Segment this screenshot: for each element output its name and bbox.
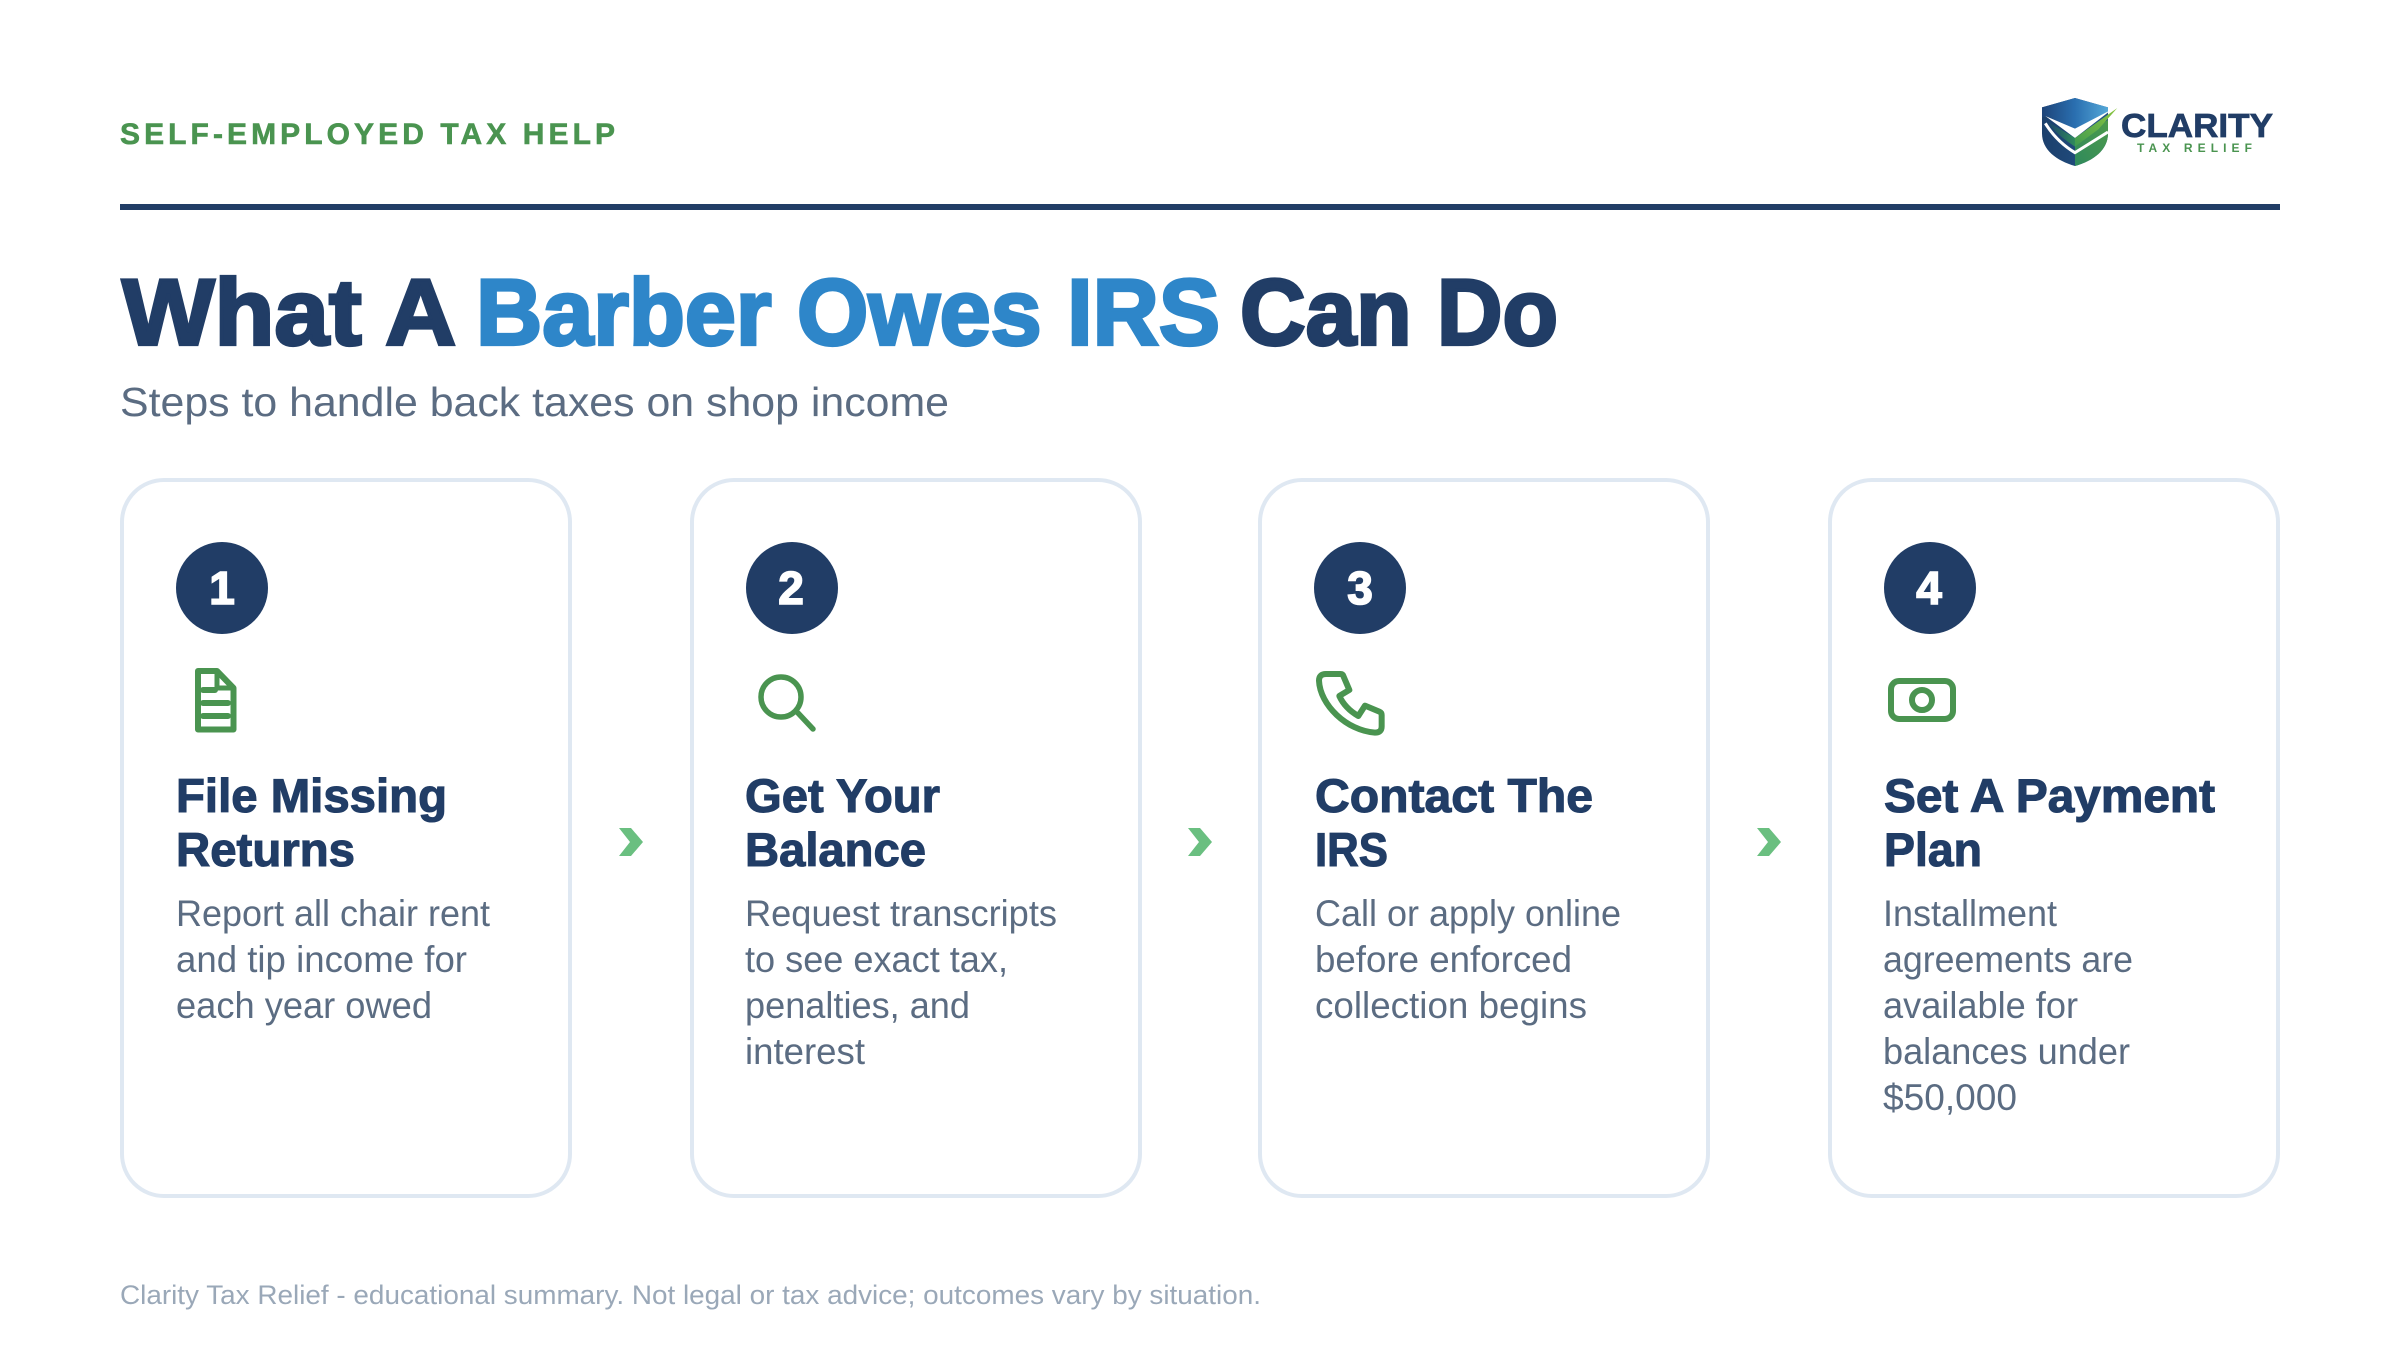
logo wordmark: CLARITY — [2121, 107, 2273, 144]
step number 2 — [746, 542, 838, 634]
step 1 description: each year owed — [176, 985, 432, 1026]
step 1 heading — [176, 769, 447, 876]
step 2 description: interest — [745, 1031, 866, 1072]
step number 4 — [1884, 542, 1976, 634]
step number 1: 1 — [209, 562, 235, 614]
step number 2: 2 — [778, 562, 804, 614]
icon: cash bill — [1891, 681, 1953, 719]
step 4 description: Installment — [1883, 893, 2058, 934]
step 4 heading: Plan — [1884, 823, 1982, 876]
header rule — [120, 204, 2280, 210]
title: Can Do — [1240, 260, 1558, 364]
logo shield icon — [2042, 98, 2117, 166]
step 3 description — [1315, 893, 1621, 1026]
panel: step 4 set a payment plan — [1830, 480, 2278, 1196]
step number 3 — [1314, 542, 1406, 634]
subtitle: Steps to handle back taxes on shop income — [120, 379, 949, 425]
step number 1 — [176, 542, 268, 634]
step 4 description: $50,000 — [1883, 1077, 2017, 1118]
step 3 heading — [1315, 769, 1593, 876]
step 2 description: penalties, and — [745, 985, 970, 1026]
arrow 1 — [619, 828, 643, 856]
title: What A — [122, 260, 456, 364]
icon: document — [198, 671, 234, 730]
step 1 heading: Returns — [176, 823, 355, 876]
step 4 description: balances under — [1883, 1031, 2130, 1072]
step 4 heading — [1884, 769, 2215, 876]
icon: magnifying glass — [761, 677, 813, 729]
title: Barber Owes IRS — [476, 260, 1220, 364]
logo: Clarity Tax Relief — [2042, 98, 2273, 166]
step 2 heading: Balance — [745, 823, 926, 876]
arrow 3 — [1757, 828, 1781, 856]
icon: phone — [1319, 674, 1382, 733]
step number 3: 3 — [1347, 562, 1373, 614]
step number 4: 4 — [1916, 562, 1942, 614]
panel: step 1 file missing returns — [122, 480, 570, 1196]
step 1 description: and tip income for — [176, 939, 467, 980]
logo tagline: TAX RELIEF — [2137, 141, 2252, 155]
step 3 description: Call or apply online — [1315, 893, 1621, 934]
step 1 description — [176, 893, 491, 1026]
step 3 description: collection begins — [1315, 985, 1587, 1026]
step 2 description: Request transcripts — [745, 893, 1057, 934]
step 1 heading: File Missing — [176, 769, 447, 822]
step 2 heading: Get Your — [745, 769, 940, 822]
eyebrow label: SELF-EMPLOYED TAX HELP — [120, 118, 615, 151]
step 3 description: before enforced — [1315, 939, 1572, 980]
step 4 description: available for — [1883, 985, 2078, 1026]
step 4 description — [1883, 893, 2133, 1118]
arrow 2 — [1188, 828, 1212, 856]
step 2 heading — [745, 769, 940, 876]
step 4 description: agreements are — [1883, 939, 2133, 980]
step 3 heading: Contact The — [1315, 769, 1593, 822]
panel: step 3 contact the IRS — [1260, 480, 1708, 1196]
panel: step 2 get your balance — [692, 480, 1140, 1196]
step 1 description: Report all chair rent — [176, 893, 491, 934]
footer disclaimer: Clarity Tax Relief - educational summary. Not legal or tax advice; outcomes vary by situation. — [120, 1280, 1261, 1310]
step 4 heading: Set A Payment — [1884, 769, 2215, 822]
title — [122, 260, 1558, 364]
step 2 description — [745, 893, 1057, 1072]
step 2 description: to see exact tax, — [745, 939, 1008, 980]
step 3 heading: IRS — [1315, 823, 1388, 876]
